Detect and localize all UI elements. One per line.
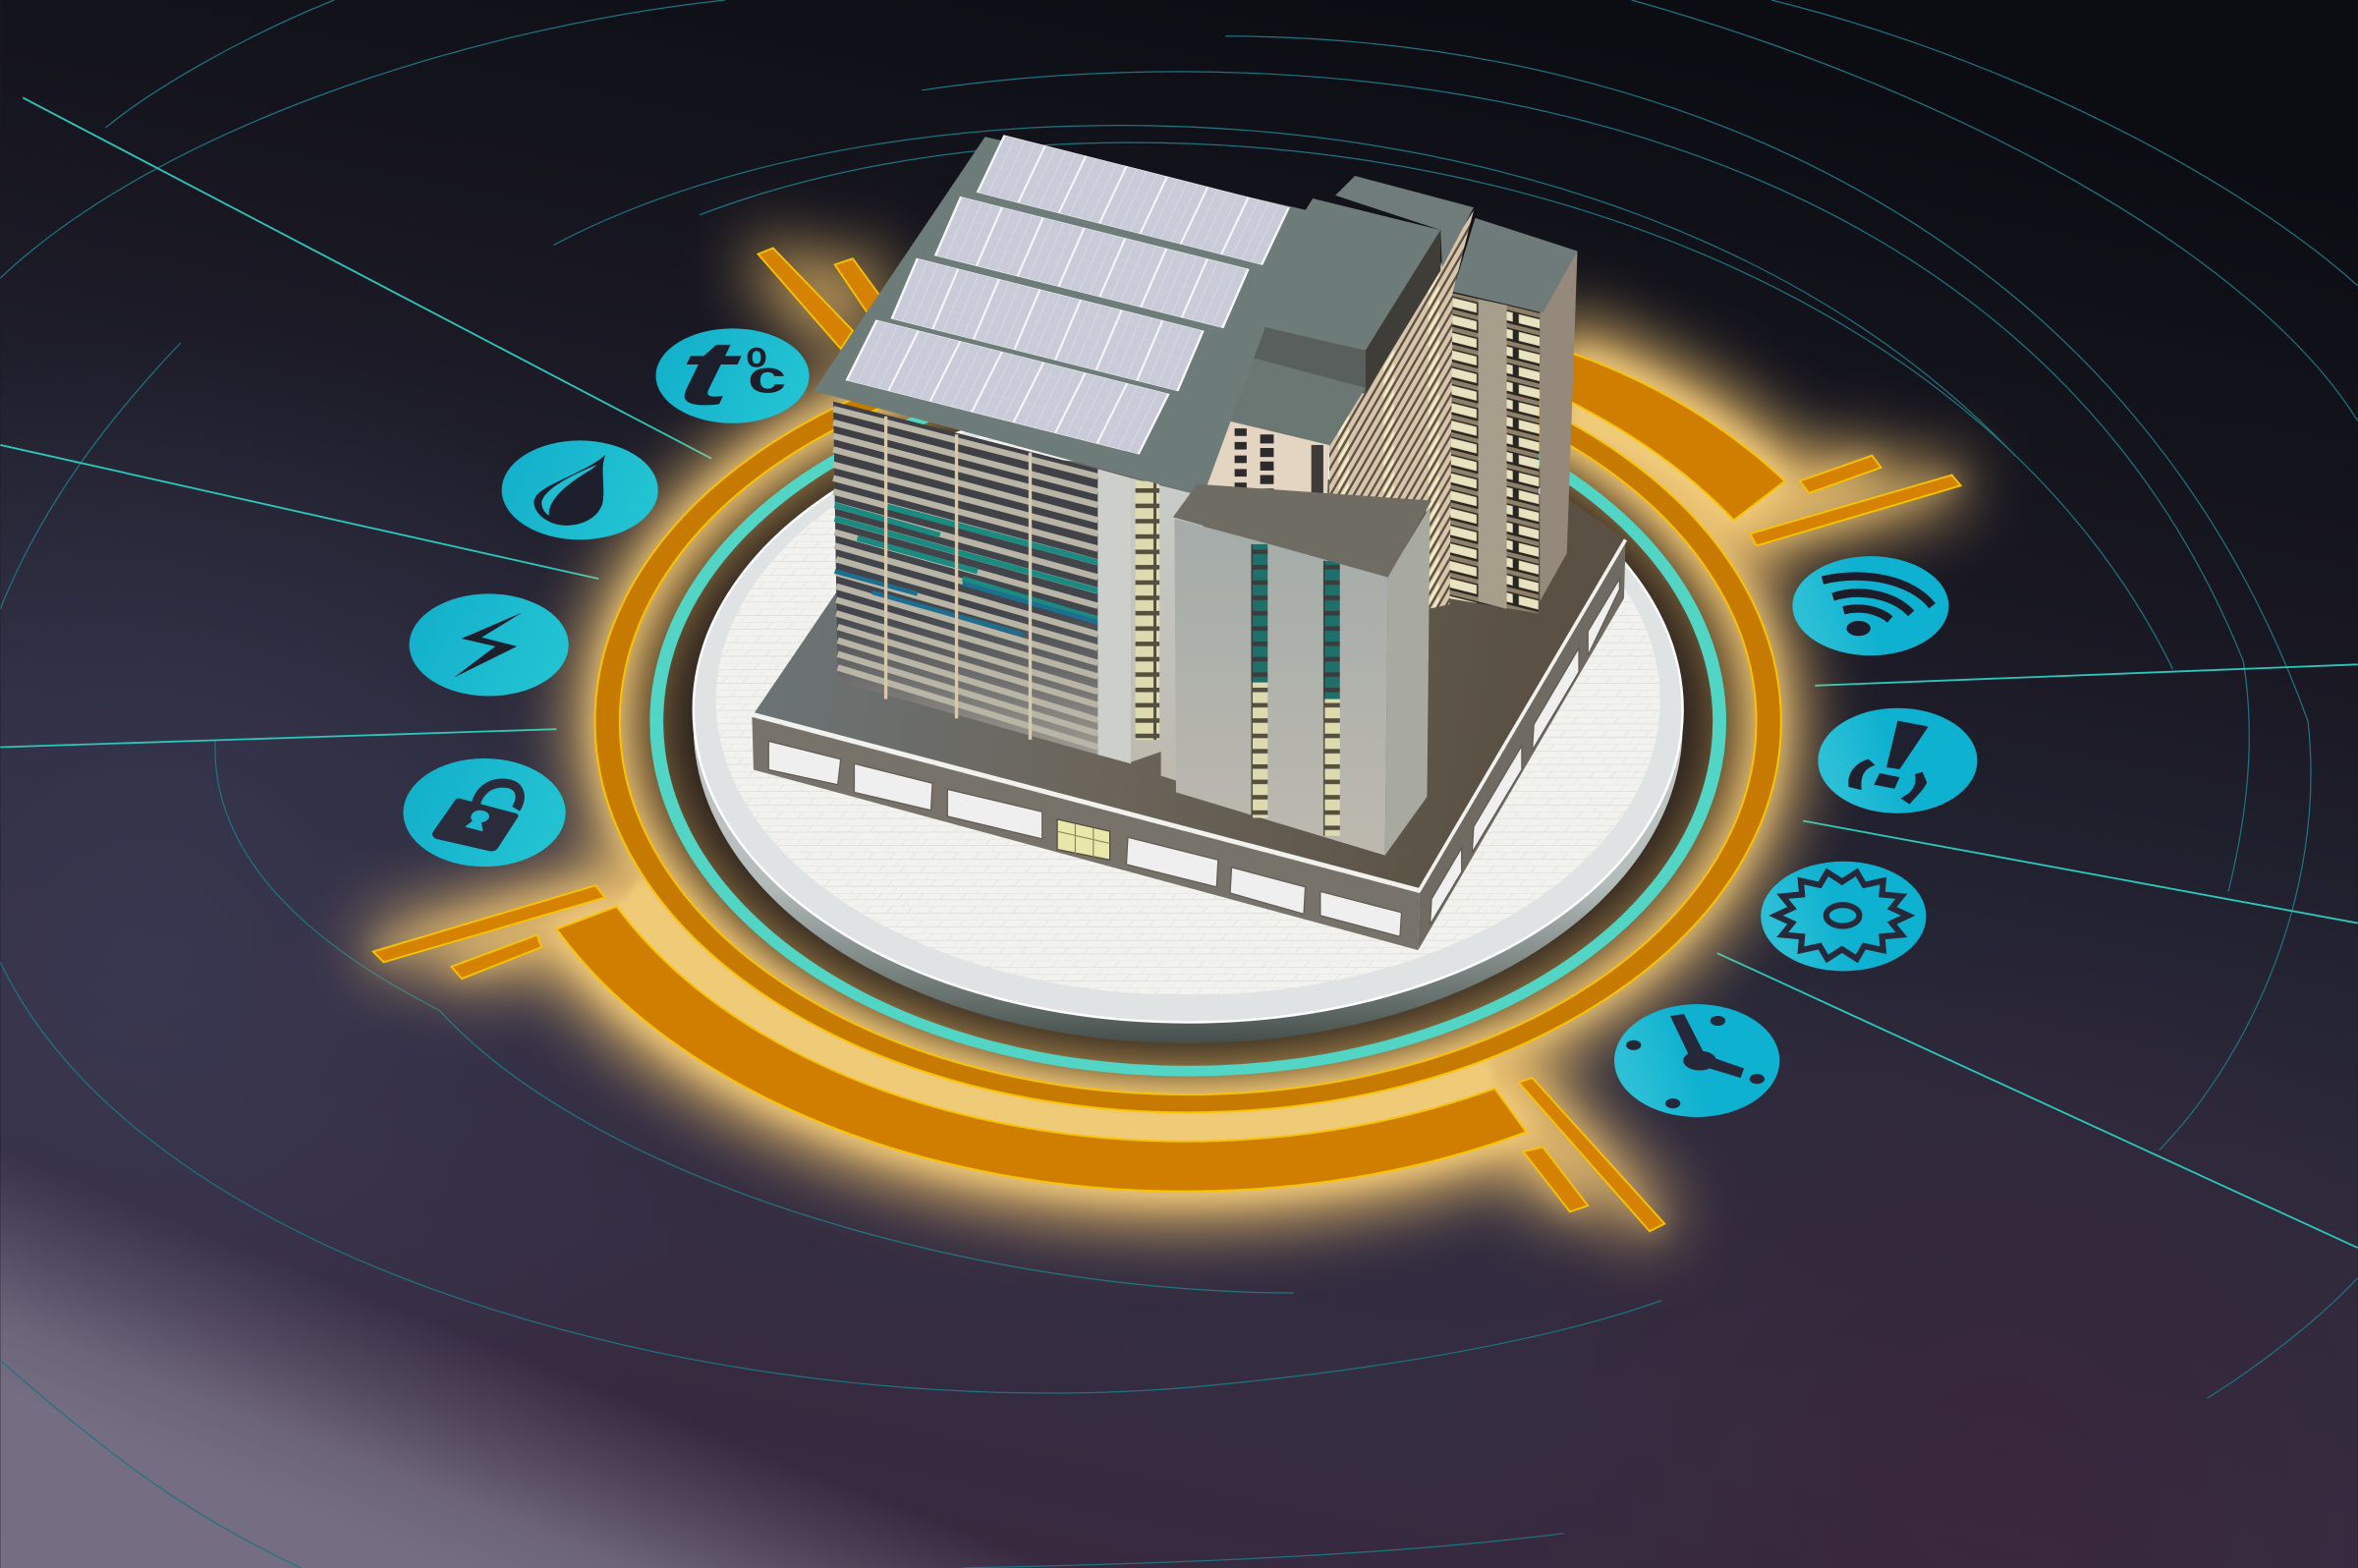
front tower window strips <box>1251 544 1340 836</box>
louvre slats <box>833 409 1097 748</box>
icon: lightning <box>410 593 569 696</box>
icon: gear <box>1761 862 1927 972</box>
main roof <box>814 137 1309 496</box>
thick orange arc top right <box>1564 351 1785 520</box>
solar panels <box>847 136 1289 454</box>
podium deck <box>754 451 1625 890</box>
upper roof side faces <box>1236 320 1366 394</box>
window strip on main block <box>1136 481 1159 740</box>
icon: clock <box>1614 1004 1779 1117</box>
entrance door <box>1057 819 1110 860</box>
thick orange arc bottom <box>556 907 1526 1192</box>
podium right wall <box>1418 542 1625 950</box>
icon: padlock <box>403 758 566 867</box>
rear roof <box>1335 176 1474 267</box>
cream block face <box>1197 414 1329 520</box>
icon: wifi <box>1792 556 1948 655</box>
golden glow around rings and ticks <box>373 252 1958 1228</box>
orange ring <box>595 331 1781 1112</box>
cream block windows <box>1235 428 1323 502</box>
main solar block <box>814 136 1309 789</box>
circular platform <box>694 397 1683 1043</box>
right tower side face <box>1540 252 1578 601</box>
icon: temperature: t <box>671 321 748 423</box>
front tower left face <box>1174 519 1388 856</box>
right tower roof <box>1452 218 1578 312</box>
podium front wall <box>752 717 1420 950</box>
right tower <box>1448 218 1578 613</box>
cream wing with balconies <box>1329 210 1474 609</box>
icon: temperature: c <box>748 352 786 402</box>
right tower front face <box>1448 293 1540 613</box>
front tower right face <box>1385 507 1431 856</box>
teal ring <box>649 366 1726 1077</box>
sharper glow layer <box>373 340 1958 1228</box>
middle block <box>1197 198 1440 520</box>
front tower <box>1173 484 1432 856</box>
upper roof <box>1236 198 1440 351</box>
icon: alert <box>1818 708 1978 813</box>
right flank of block <box>1131 478 1203 789</box>
icon: temperature: o <box>746 334 767 375</box>
radial teal lines <box>0 97 2358 1248</box>
teal tinted slats <box>835 505 1097 619</box>
icon: water drop <box>502 440 658 539</box>
icon: temperature <box>655 321 810 423</box>
lower terrace roof <box>1197 354 1366 446</box>
louvre mullions <box>886 417 1031 740</box>
side pier <box>1097 469 1131 763</box>
louvre facade <box>833 402 1097 755</box>
dark floor inside the rings <box>614 346 1763 1097</box>
orange tick marks <box>373 248 1961 1231</box>
cream band between rings <box>617 403 1760 1142</box>
podium base <box>752 451 1625 950</box>
podium window panels <box>768 579 1619 936</box>
front tower roof <box>1173 484 1432 578</box>
